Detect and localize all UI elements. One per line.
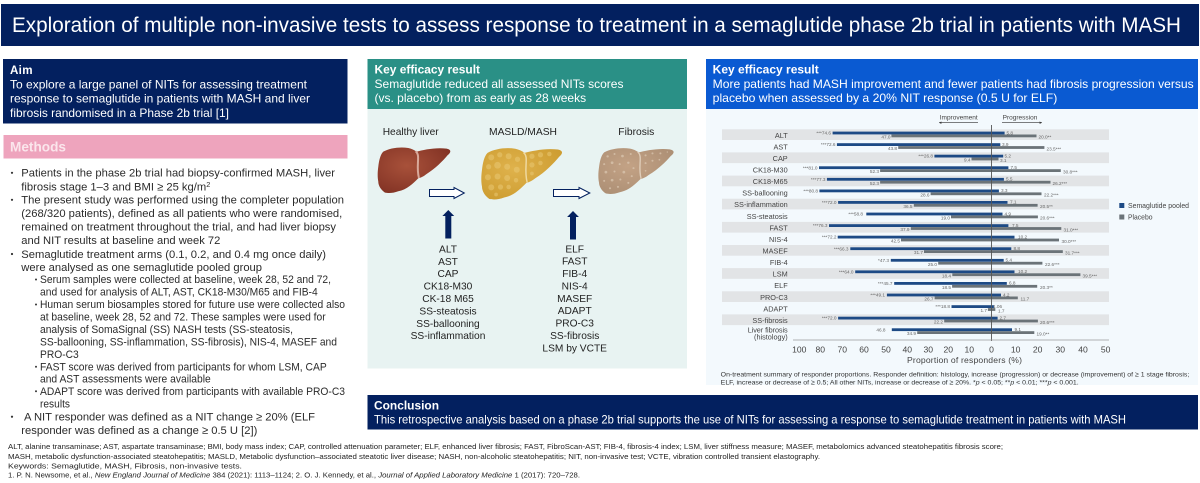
- row: CK18-M30: 7.5: [1010, 165, 1017, 170]
- text block: methods list: remained on treatment throughout the trial, and had liver biopsy: [21, 222, 336, 234]
- row: SS-steatosis: ***58.8: [848, 212, 863, 217]
- row: FAST: 7.5: [1012, 223, 1019, 228]
- text block: methods list: PRO-C3: [40, 349, 79, 361]
- row: ALT: ***74.6: [816, 131, 831, 136]
- list: MASLD NITs: [411, 244, 485, 342]
- text block: methods list: SS-ballooning, SS-inflammation, SS-fibrosis), NIS-4, MASEF and: [40, 336, 337, 348]
- row: LSM: 10.2: [1018, 269, 1028, 274]
- list: MASLD NITs: CK18-M30: [424, 282, 473, 293]
- list: fibrosis NITs: [542, 244, 607, 354]
- text block: methods list: results: [40, 398, 70, 410]
- row: SS-inflammation: 20.5**: [1040, 204, 1053, 209]
- row: liver fibrosis (histology): [748, 325, 1049, 341]
- row: SS-inflammation: ***72.0: [822, 200, 837, 205]
- row: CK18-M30: 52.3: [870, 169, 879, 174]
- row: CAP: ***26.8: [918, 154, 933, 159]
- row: SS-inflammation: 7.1: [1010, 200, 1017, 205]
- x axis: 80: [816, 344, 825, 354]
- row: FIB-4: [770, 258, 1060, 267]
- panel: aim: Aim: [10, 64, 32, 77]
- text block: methods list: Patients in the phase 2b trial had biopsy-confirmed MASH, liver: [21, 168, 335, 180]
- row: SS-ballooning: 3.3: [1001, 188, 1008, 193]
- row: CAP: 9.4: [964, 158, 971, 163]
- row: PRO-C3: 26.7: [924, 296, 934, 301]
- row: SS-ballooning: ***80.8: [803, 188, 818, 193]
- text block: methods list: and NIT results at baseline and week 72: [21, 235, 220, 247]
- text block: methods list: and AST assessments were available: [40, 374, 211, 386]
- row: MASEF: 31.7***: [1065, 250, 1080, 255]
- row: CK18-M65: 26.2***: [1052, 181, 1067, 186]
- row: CK18-M65: ***77.3: [811, 177, 826, 182]
- panel heading: MASH improvement and fibrosis progression: placebo when assessed by a 20% NIT response (0.5 U for ELF): [713, 92, 1057, 105]
- row: MASEF: 31.7: [914, 250, 923, 255]
- row: ALT: 5.8: [1006, 130, 1013, 135]
- row: FAST: FAST: [769, 223, 788, 232]
- list: MASLD NITs: AST: [438, 257, 458, 268]
- row: FIB-4: 22.6***: [1045, 262, 1060, 267]
- footnotes: abbreviations and references: 1. P. N. Newsome, et al., New England Journal of Medicine 384 (2021): 1113–1124; 2. O. J. Kennedy, et al., Journal of Applied Laboratory Medicine 1 (2017): 720–728.: [8, 470, 580, 480]
- x axis: 20: [1033, 344, 1043, 354]
- row: CAP: 5.2: [1004, 153, 1011, 158]
- row: CK18-M30: ***81.0: [803, 165, 818, 170]
- direction label: progression: Progression: [1003, 114, 1038, 122]
- icon: healthy liver: [378, 147, 450, 193]
- icon: fibrotic liver: [598, 148, 674, 194]
- panel: aim: response to semaglutide in patients with MASH and liver: [10, 92, 310, 106]
- row: SS-ballooning: SS-ballooning: [742, 189, 788, 198]
- list: fibrosis NITs: MASEF: [557, 294, 592, 305]
- row: NIS-4: ***72.2: [822, 235, 837, 240]
- row: AST: 43.8: [888, 146, 897, 151]
- row: LSM: 39.5***: [1082, 274, 1097, 279]
- row: AST: 23.5***: [1046, 146, 1061, 151]
- row: FAST: [722, 222, 1109, 233]
- row: liver fibrosis (histology): 19.0**: [1036, 331, 1049, 336]
- chart footnote: [721, 372, 1189, 386]
- list: MASLD NITs: SS-steatosis: [419, 306, 477, 317]
- x axis: 50: [1101, 344, 1111, 354]
- row: ADAPT: ADAPT: [763, 304, 788, 313]
- row: NIS-4: 30.0***: [1062, 239, 1076, 244]
- row: liver fibrosis (histology): Liver fibrosis: [748, 325, 788, 334]
- x axis: 20: [944, 344, 953, 354]
- row: PRO-C3: [722, 291, 1109, 302]
- row: CK18-M65: 5.5: [1006, 177, 1013, 182]
- text block: methods list: Human serum biosamples stored for future use were collected also: [40, 299, 345, 311]
- x axis: 0: [989, 344, 994, 354]
- zero line: [990, 125, 992, 341]
- list: fibrosis NITs: NIS-4: [562, 281, 588, 292]
- healthy liver label: Healthy liver: [383, 127, 439, 138]
- footnotes: abbreviations and references: Keywords: Semaglutide, MASH, Fibrosis, non-invasive tests.: [8, 462, 242, 470]
- row: ALT: 47.0: [881, 135, 891, 140]
- row: SS-steatosis: 20.6***: [1040, 216, 1055, 221]
- row: CK18-M30: 30.8***: [1063, 169, 1078, 174]
- row: FAST: 37.9: [900, 227, 910, 232]
- legend: Semaglutide pooled: [1128, 201, 1189, 210]
- row: MASEF: 8.8: [1014, 246, 1020, 251]
- row: FIB-4: *47.3: [878, 258, 889, 263]
- panel: conclusion: Conclusion: [374, 400, 439, 412]
- row: CAP: CAP: [773, 154, 788, 163]
- text block: methods list: [11, 168, 345, 437]
- direction label: improvement: Improvement: [940, 114, 978, 122]
- MASLD/MASH label: MASLD/MASH: [489, 127, 557, 138]
- text block: methods list: Serum samples were collected at baseline, week 28, 52 and 72,: [40, 274, 331, 286]
- panel heading: semaglutide reduced NIT scores: (vs. placebo) from as early as 28 weeks: [374, 92, 586, 105]
- footnotes: abbreviations and references: MASH, metabolic dysfunction-associated steatohepatitis; MASLD, Metabolic dysfunction–associated steatotic liver disease; NASH, non-alcoholic steatohepatitis; NIT, non-invasive test; VCTE, vibration controlled transient elastography.: [8, 452, 820, 461]
- row: MASEF: ***66.3: [834, 246, 849, 251]
- arrow: up to fibrosis: [567, 211, 579, 240]
- row: FIB-4: 5.4: [1006, 258, 1012, 263]
- row: LSM: ***64.0: [839, 269, 854, 274]
- row: SS-steatosis: 19.0: [941, 216, 950, 221]
- row: PRO-C3: 4.2: [1003, 292, 1010, 297]
- panel: methods heading: Methods: [10, 140, 66, 154]
- x axis: 100: [792, 344, 807, 354]
- row: LSM: 18.4: [942, 273, 951, 278]
- row: FIB-4: FIB-4: [770, 258, 788, 267]
- row: PRO-C3: PRO-C3: [760, 293, 788, 302]
- axis title: Proportion of responders (%): [907, 355, 1022, 365]
- row: ELF: [774, 281, 1053, 290]
- panel: key efficacy result, liver progression: [368, 59, 687, 368]
- row: MASEF: [722, 245, 1109, 256]
- text block: methods list: ADAPT score was derived from participants with available PRO-C3: [40, 386, 345, 398]
- x axis: 40: [903, 344, 912, 354]
- row: SS-fibrosis: [722, 314, 1109, 325]
- row: ELF: ELF: [774, 281, 788, 290]
- row: AST: [773, 142, 1061, 151]
- row: CAP: [722, 152, 1109, 163]
- list: fibrosis NITs: PRO-C3: [555, 318, 594, 330]
- list: MASLD NITs: CAP: [438, 269, 459, 280]
- row: FIB-4: 25.0: [928, 262, 937, 267]
- text block: methods list: The present study was performed using the completer population: [21, 195, 344, 207]
- arrow: MASLD to fibrosis: [554, 188, 590, 198]
- panel: aim: To explore a large panel of NITs for assessing treatment: [10, 78, 308, 91]
- list: MASLD NITs: SS-inflammation: [411, 331, 485, 342]
- row: ALT: 20.0**: [1038, 135, 1051, 140]
- list: fibrosis NITs: FIB-4: [562, 269, 587, 280]
- icon: MASLD liver: [481, 148, 562, 199]
- panel heading: MASH improvement and fibrosis progression: Key efficacy result: [713, 64, 819, 76]
- row: ELF: 20.3**: [1040, 285, 1053, 290]
- row: NIS-4: 10.2: [1018, 234, 1028, 239]
- row: ELF: ***45.7: [878, 281, 893, 286]
- chart footnote: On-treatment summary of responder proportions. Responder definition: histology, increase (progression) or decrease (improvement) of ≥ 1 stage fibrosis;: [721, 372, 1189, 378]
- text block: methods list: (268/320 patients), defined as all patients who were randomised,: [21, 208, 342, 220]
- list: MASLD NITs: SS-ballooning: [416, 319, 480, 330]
- row: CK18-M30: [753, 165, 1078, 174]
- row: MASEF: MASEF: [763, 246, 788, 256]
- text block: methods list: were analysed as one semaglutide pooled group: [20, 262, 262, 274]
- list: fibrosis NITs: SS-fibrosis: [550, 331, 599, 342]
- row: liver fibrosis (histology): (histology): [754, 332, 788, 341]
- row: SS-inflammation: SS-inflammation: [734, 200, 788, 209]
- arrow: healthy liver to MASLD: [430, 188, 464, 198]
- x axis: 10: [965, 344, 974, 354]
- row: SS-fibrosis: ***72.0: [822, 316, 837, 321]
- text block: methods list: and used for analysis of ALT, AST, CK18-M30/M65 and FIB-4: [40, 287, 318, 299]
- row: ADAPT: 1.7: [998, 308, 1005, 313]
- footnotes: abbreviations and references: [8, 442, 1003, 480]
- row: liver fibrosis (histology): 46.8: [876, 327, 886, 332]
- row: ADAPT: ***18.8: [935, 304, 950, 309]
- row: SS-fibrosis: 22.2: [934, 320, 943, 325]
- list: fibrosis NITs: ADAPT: [558, 306, 592, 317]
- row: PRO-C3: ***49.1: [870, 293, 885, 298]
- x axis: 40: [1078, 344, 1088, 354]
- row: SS-fibrosis: 20.6***: [1040, 320, 1055, 325]
- arrow: up to MASLD: [442, 210, 454, 238]
- row: SS-fibrosis: SS-fibrosis: [752, 316, 788, 325]
- row: SS-inflammation: [722, 199, 1109, 209]
- panel: key efficacy result, responders chart: [706, 59, 1198, 386]
- x axis: 10: [1011, 344, 1021, 354]
- chart footnote: ELF, increase or decrease of ≥ 0.5; All other NITs, increase or decrease of ≥ 20%. * p < 0.05; **p < 0.01; ***p < 0.001.: [721, 380, 1079, 386]
- row: CK18-M65: 52.3: [870, 181, 879, 186]
- panel: aim: fibrosis randomised in a Phase 2b trial [1]: [10, 107, 229, 120]
- title: [1, 4, 1199, 46]
- panel: aim: [3, 59, 348, 124]
- panel: conclusion: This retrospective analysis based on a phase 2b trial supports the use of NITs for assessing a response to semaglutide treatment in patients with MASH: [374, 413, 1126, 426]
- row: FAST: 31.0***: [1064, 227, 1078, 232]
- row: NIS-4: 42.5: [891, 239, 900, 244]
- list: fibrosis NITs: ELF: [565, 244, 584, 255]
- row: NIS-4: NIS-4: [769, 235, 788, 244]
- row: ADAPT: 1.7: [980, 308, 987, 313]
- row: ADAPT: [763, 304, 1005, 313]
- row: ALT: ALT: [775, 131, 788, 140]
- row: SS-ballooning: 22.2***: [1044, 193, 1059, 198]
- row: AST: 3.9: [1002, 142, 1009, 147]
- row: CAP: 3.1: [1000, 158, 1007, 163]
- row: CK18-M65: [722, 176, 1109, 186]
- row: SS-steatosis: [747, 211, 1055, 221]
- row: FAST: ***76.3: [813, 223, 828, 228]
- row: SS-fibrosis: 2.7: [1000, 315, 1006, 320]
- text block: methods list: fibrosis stage 1–3 and BMI ≥ 25 kg/m: [21, 181, 209, 193]
- footnotes: abbreviations and references: ALT, alanine transaminase; AST, aspartate transaminase; BMI, body mass index; CAP, controlled attenuation parameter; ELF, enhanced liver fibrosis; FAST, FibroScan-AST; FIB-4, fibrosis-4 index; LSM, liver stiffness measure; MASEF, metabolomics advanced steatohepatitis fibrosis score;: [8, 442, 1003, 451]
- row: CK18-M65: CK18-M65: [753, 177, 788, 186]
- text block: methods list: at baseline, week 28, 52 and 72. These samples were used for: [40, 312, 326, 324]
- row: liver fibrosis (histology): 34.9: [907, 331, 916, 336]
- x axis: 50: [881, 344, 891, 354]
- fibrosis label: Fibrosis: [618, 127, 654, 138]
- panel heading: semaglutide reduced NIT scores: Semaglutide reduced all assessed NITs scores: [374, 78, 624, 91]
- text block: methods list: A NIT responder was defined as a NIT change ≥ 20% (ELF: [24, 412, 315, 424]
- row: SS-steatosis: 4.9: [1004, 211, 1011, 216]
- panel heading: semaglutide reduced NIT scores: [368, 59, 687, 109]
- bar chart: proportion of responders: [722, 114, 1189, 365]
- text block: methods list: Semaglutide treatment arms (0.1, 0.2, and 0.4 mg once daily): [21, 249, 326, 261]
- row: NIS-4: [769, 234, 1076, 244]
- row: LSM: [722, 268, 1109, 279]
- row: SS-inflammation: 36.5: [903, 204, 913, 209]
- panel: conclusion: [368, 395, 1198, 430]
- text block: methods list: analysis of SomaSignal (SS) NASH tests (SS-steatosis,: [40, 324, 293, 336]
- row: AST: ***72.6: [821, 142, 836, 147]
- list: MASLD NITs: CK-18 M65: [422, 294, 474, 305]
- row: CK18-M30: CK18-M30: [753, 166, 788, 174]
- row: PRO-C3: 11.7: [1020, 297, 1030, 302]
- panel heading: MASH improvement and fibrosis progression: [706, 59, 1198, 109]
- x axis: 30: [1056, 344, 1065, 354]
- row: ADAPT: 1.06: [993, 304, 1003, 309]
- row: LSM: LSM: [773, 270, 788, 279]
- row: SS-steatosis: SS-steatosis: [747, 212, 788, 221]
- x axis: 30: [924, 344, 933, 354]
- text block: methods list: 2: [206, 180, 210, 189]
- legend: [1119, 201, 1189, 222]
- legend: Placebo: [1128, 212, 1152, 222]
- row: liver fibrosis (histology): 9.1: [1014, 327, 1021, 332]
- row: ALT: [722, 129, 1109, 140]
- x axis: 60: [859, 344, 869, 354]
- title: Exploration of multiple non-invasive tests to assess response to treatment in a semaglutide phase 2b trial in patients with MASH: [12, 14, 1181, 37]
- list: fibrosis NITs: LSM by VCTE: [542, 343, 607, 354]
- x axis: 70: [838, 344, 847, 354]
- list: MASLD NITs: ALT: [439, 244, 457, 255]
- row: ELF: 18.5: [942, 285, 951, 290]
- panel heading: semaglutide reduced NIT scores: Key efficacy result: [374, 64, 480, 76]
- row: SS-ballooning: [742, 188, 1059, 198]
- text block: methods list: FAST score was derived from participants for whom LSM, CAP: [40, 361, 327, 373]
- row: SS-ballooning: 28.6: [920, 192, 930, 197]
- x axis: [792, 340, 1111, 365]
- row: ELF: 6.8: [1009, 281, 1016, 286]
- list: fibrosis NITs: FAST: [562, 257, 587, 268]
- text block: methods list: responder was defined as a change ≥ 0.5 U [2]): [21, 425, 258, 437]
- panel: methods heading: [4, 135, 348, 158]
- panel heading: MASH improvement and fibrosis progression: More patients had MASH improvement and fewer patients had fibrosis progression versus: [713, 78, 1194, 91]
- row: AST: AST: [773, 142, 788, 151]
